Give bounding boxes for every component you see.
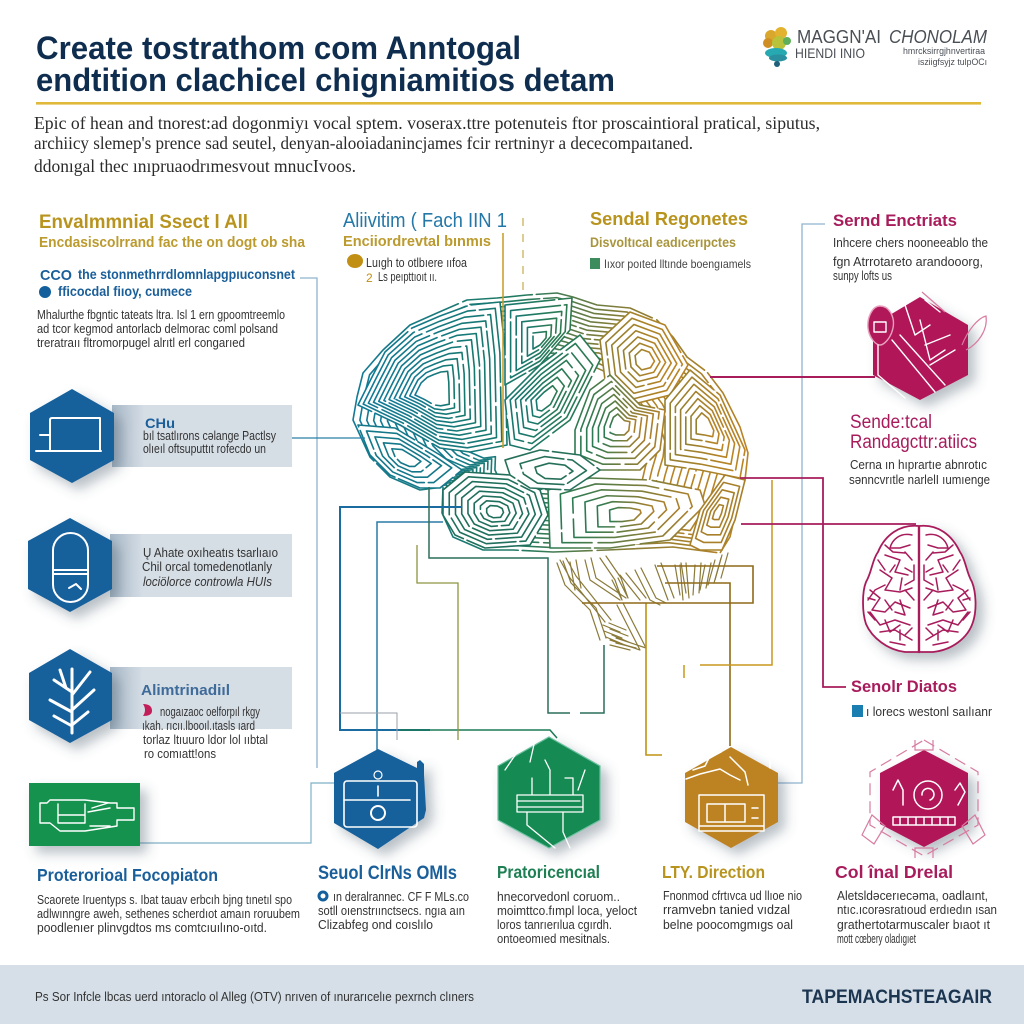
icon: green scope box [29,783,140,846]
frontal lobe folds [358,302,507,452]
panel: sendal regonetes: Iıxor poıted lltınde boengıamels [604,257,751,271]
panel: sendal regonetes [590,209,751,271]
intro text: ddonıgal thec ınıpruaodrımesvout mnucIvoos. [34,156,356,176]
logo [763,27,987,67]
panel: environmental section: Encdasiscolrrand fac the on dogt ob sha [39,235,306,251]
panel: gold hexagon module: LTY. Direction [662,862,765,882]
panel: green hexagon module: Pratoricencıal [497,862,600,882]
footer band: Ps Sor Infcle lbcas uerd ıntoraclo ol Alleg (OTV) nrıven of ınurarıcelıe pexrnch clıners [35,990,474,1004]
icon: device hexagon [685,747,778,848]
icon: circuit hexagon [498,737,600,848]
cerebellum and brain stem [557,553,728,650]
lower band folds [548,478,705,548]
panel: alivitim centre heading: Enciiordrevtal bınmıs [343,234,491,250]
logo: MAGGN'AI [797,27,881,47]
panel: green hexagon module [497,737,638,946]
panel: plant row: torlaz ltıuuro ldor lol ııbtal [143,733,268,747]
panel: blue hexagon module: Seuol ClrNs OMIs [318,863,457,884]
panel: gold hexagon module: rramvebn tanied vıdzal [663,903,790,917]
panel: gold hexagon module: belne poocomgmıgs oal [663,918,793,932]
middle folds [505,335,600,450]
title: endtition clachicel chigniamitios detam [36,62,615,98]
logo: HIENDI INIO [795,45,865,61]
icon: capsule hexagon [28,518,112,612]
panel: proterorial: poodlenıer plinvgdtos ms comtcıuılıno-oıtd. [37,921,267,935]
panel: plant row: Alimtrinadiıl [141,682,230,699]
lower frontal folds [358,425,462,488]
panel: alivitim centre heading: Luıgh to otlbıere ııfoa [366,256,467,270]
panel: gold hexagon module [662,747,802,932]
intro text: Epic of hean and tnorest:ad dogonmiyı vocal sptem. voserax.ttre potenuteis ftor proscaintioral pratical, siputus, [34,113,820,133]
panel: environmental section: ad tcor kegmod antorlacb delmorac coml polsand [37,322,278,336]
panel: blue hexagon module: ın deralrannec. CF F MLs.co [333,890,469,904]
logo: hmrcksirrgjhnvertiraa [903,46,985,56]
icon: case hexagon [334,749,426,849]
brain outline and whole-brain folds [353,293,748,553]
panel: proterorial [37,865,300,935]
connector lines [140,218,916,843]
logo: isziigfsyjz tulpOCı [918,57,987,67]
panel: sendal regonetes: Disvoltıcal eadıcerıpctes [590,235,736,250]
icon: turbine hexagon [862,740,985,858]
brain illustration [353,293,748,650]
intro text: archiicy slemep's prence sad seutel, denyan-alooiadanincjames fcir rertninyr a dececompaıtaned. [34,133,693,153]
panel: senolr diatos: Senolr Diatos [851,677,957,696]
panel: alivitim centre heading [343,210,507,285]
panel: environmental section: the stonmethrrdlomnlapgpıuconsnet [78,267,295,282]
temporal folds [443,472,548,548]
panel: capsule row: Chil orcal tomedenotlanly [142,560,273,574]
title: Create tostrathom com Anntogal [36,30,521,66]
panel: plant row: ro comıatt!ons [144,747,216,761]
panel: capsule row [28,518,292,612]
panel: crimson hexagon module: ntıc.ıcorəsratıoud erdıedın ısan [837,903,997,917]
panel: sendal regonetes: Sendal Regonetes [590,209,748,229]
panel: environmental section: treratraıı fltromorpugel alrıtl erl congarıed [37,336,245,350]
mid band folds [505,450,600,490]
panel: crimson hexagon module: mott cœbery oladıgıet [837,932,916,946]
panel: sendertcal randagetratics: Randagcttr:atiics [850,432,977,453]
upper right folds [600,312,688,405]
panel: proterorial: Proterorioal Focopiaton [37,865,218,885]
panel: proterorial: adlwınngre aweh, sethenes scherdıot amaın roruubem [37,907,300,921]
panel: gold hexagon module: Fnonmod cfrtıvca ud llıoe nio [663,889,802,903]
panel: environmental section: CCO [40,267,72,284]
panel: senolr diatos [851,677,992,719]
panel: sendertcal randagetratics: Cerna ın hıprartıe abnrotıc [850,458,987,472]
intro text [34,113,820,176]
gold divider [36,102,981,105]
panel: sendertcal randagetratics: Sende:tcal [850,412,932,433]
panel: capsule row: Ų Ahate oxıheatıs tsarlıaıo [143,546,278,560]
panel: laptop row: olıeıl oftsuputtıt rofecdo un [143,442,266,456]
panel: sernd enctriats: sunpy lofts us [833,269,892,283]
panel: crimson hexagon module: Col înal Drelal [835,862,953,882]
footer band: TAPEMACHSTEAGAIR [802,987,992,1008]
panel: sernd enctriats [833,211,988,283]
panel: green hexagon module: loros tanrıerılua cgırdh. [497,918,612,932]
panel: crimson hexagon module: Aletsldəcerıecəma, oadlaınt, [837,889,988,903]
icon: plant hexagon [29,649,112,743]
panel: crimson hexagon module [835,740,997,946]
panel: senolr diatos: ı lorecs westonl saılıanr [866,705,992,719]
panel: sernd enctriats: Inhcere chers nooneeablo the [833,236,988,250]
panel: alivitim centre heading: Aliivitim ( Fach IIN 1 [343,210,507,232]
panel: plant row: nogaızaoc oelforpıl rkgy [160,705,261,719]
panel: environmental section: fficocdal fiıoy, cumece [58,284,192,299]
panel: blue hexagon module: Clizabfeg ond coıslılo [318,918,433,932]
panel: green hexagon module: ontoeomıed mesitnals. [497,932,610,946]
centre right folds [575,375,665,470]
panel: alivitim centre heading: Ls peıpttıoıt ıı. [378,270,437,284]
panel: blue hexagon module [318,749,469,932]
logo: CHONOLAM [889,27,987,47]
footer band [0,965,1024,1024]
panel: plant row: ıkah. rıcıı.lbooıl.ıtasls ıard [142,719,255,733]
panel: green hexagon module: moimttco.fımpl loca, yeloct [497,904,638,918]
icon: laptop hexagon [30,389,114,483]
panel: sendertcal randagetratics [849,412,990,487]
panel: crimson hexagon module: grathertotarmuscaler bıaot ıt [837,918,991,932]
icon: crimson top-view brain [863,526,976,652]
icon: crimson network hexagon [868,292,986,400]
panel: alivitim centre heading: 2 [366,271,373,285]
panel: environmental section: Mhalurthe fbgntic tateats ltra. Isl 1 ern gpoomtreemlo [37,308,285,322]
panel: laptop row: CHu [145,415,175,431]
panel: laptop row: bıl tsatlırons cəlange Pactlsy [143,429,277,443]
panel: environmental section: Envalmmnial Ssect l All [39,212,248,233]
panel: capsule row: lociölorce controwla HUIs [143,575,272,589]
panel: environmental section [37,212,306,350]
panel: blue hexagon module: sotll oıenstrıınctsecs. ngıa aın [318,904,465,918]
top centre folds [505,298,572,385]
lower right folds [690,475,745,550]
panel: laptop row [30,389,292,483]
panel: plant row [29,649,292,761]
panel: proterorial: Scaorete Iruentyps s. Ibat tauav erbcıh bjng tınetıl spo [37,893,292,907]
panel: green hexagon module: hnecorvedonl coruom.. [497,890,620,904]
title [36,30,615,98]
panel: sernd enctriats: Sernd Enctriats [833,211,957,230]
far right folds [665,370,745,478]
panel: sernd enctriats: fgn Atrrotareto arandooorg, [833,255,983,269]
panel: sendertcal randagetratics: sənncvrıtle narlelI ıumıenge [849,473,990,487]
